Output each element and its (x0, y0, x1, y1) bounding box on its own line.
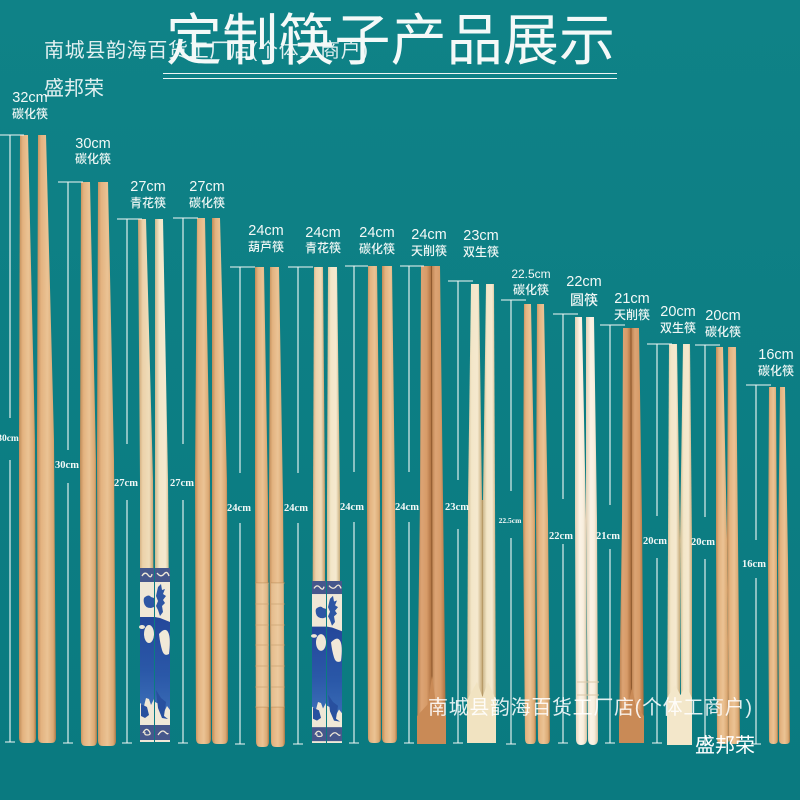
dimension line 27cm: 27cm (114, 478, 138, 489)
label: 22.5cm (511, 267, 551, 297)
dimension line 23cm: 23cm (445, 502, 469, 513)
dimension line 32cm side: 30cm (0, 135, 24, 742)
label: 21cm tensoge: 天削筷 (614, 307, 650, 322)
label: 20cm twin (660, 304, 696, 335)
label: 27cm carbonized (189, 179, 225, 210)
blue and white pattern (311, 581, 342, 743)
twin base (667, 685, 692, 745)
label: 24cm gourd (248, 223, 284, 254)
dimension line 27cm: 27cm (170, 478, 194, 489)
tensoge base (619, 688, 644, 743)
dimension line 22cm (549, 314, 578, 743)
label: 24cm tensoge (411, 227, 447, 258)
dimension line 30cm (55, 182, 83, 743)
chopstick pair: 20cm carbonized (716, 347, 740, 744)
label: 20cm carbonized: 碳化筷 (705, 324, 741, 339)
dimension line 16cm: 16cm (742, 559, 766, 570)
dimension line 20cm (643, 344, 672, 743)
tensoge base (417, 676, 446, 744)
twin split fill (482, 500, 483, 700)
dimension line 20cm: 20cm (643, 536, 667, 547)
dimension line 24cm (395, 266, 424, 743)
chopstick pair: 24cm gourd (255, 267, 285, 747)
label: 24cm tensoge: 24cm (411, 227, 447, 243)
dimension line 22.5cm: 22.5cm (499, 516, 522, 525)
dimension line 24cm (227, 267, 255, 744)
chopstick pair: 23cm twin (467, 284, 496, 743)
label: 24cm blue and white (305, 225, 341, 255)
dimension line 23cm (445, 281, 473, 743)
label: 16cm (758, 347, 794, 378)
label: 24cm carbonized (359, 225, 395, 256)
label: 27cm carbonized: 碳化筷 (189, 195, 225, 210)
chopstick pair: 21cm tensoge (619, 328, 644, 743)
dimension line 24cm (340, 266, 368, 743)
label: 24cm tensoge: 天削筷 (411, 243, 447, 258)
dimension line 22.5cm (499, 300, 526, 744)
label: 32cm: 碳化筷 (12, 106, 48, 121)
chopstick pair: 27cm carbonized (195, 218, 228, 744)
label: 20cm carbonized (705, 308, 741, 339)
chopstick pair: 32cm carbonized (19, 135, 56, 743)
label: 24cm blue and white: 青花筷 (305, 240, 341, 255)
dimension line 21cm (596, 325, 625, 743)
label: 23cm twin: 23cm (463, 228, 499, 244)
label: 22.5cm: 22.5cm (511, 267, 551, 281)
dimension line 21cm: 21cm (596, 531, 620, 542)
dimension line 24cm: 24cm (227, 503, 251, 514)
dimension line 30cm: 30cm (55, 460, 79, 471)
label: 20cm twin: 20cm (660, 304, 696, 320)
dimension line 22cm: 22cm (549, 531, 573, 542)
label: 30cm: 碳化筷 (75, 151, 111, 166)
label: 24cm gourd: 葫芦筷 (248, 239, 284, 254)
label: 24cm gourd: 24cm (248, 223, 284, 239)
label: 27cm blue and white: 青花筷 (130, 195, 166, 210)
label: 24cm carbonized: 24cm (359, 225, 395, 241)
dimension line 27cm (170, 218, 198, 743)
chopstick pair: 22cm round (575, 317, 599, 745)
chopstick pair: 24cm blue and white (311, 267, 342, 743)
dimension line 20cm: 20cm (691, 537, 715, 548)
label: 22cm round: 圆筷 (570, 292, 598, 308)
gourd carved segments (255, 583, 285, 707)
dimension line 24cm: 24cm (395, 502, 419, 513)
label: 21cm tensoge (614, 291, 650, 322)
tensoge split line (630, 328, 632, 690)
dimension line 20cm (691, 345, 720, 744)
tensoge split line (430, 266, 433, 680)
chopstick pair: 20cm twin (667, 344, 692, 745)
label: 20cm carbonized: 20cm (705, 308, 741, 324)
chopstick pair: 24cm tensoge (417, 266, 446, 744)
label: 22cm round: 22cm (566, 274, 602, 290)
label: 22.5cm: 碳化筷 (513, 282, 549, 297)
watermark bottom: shop name: 南城县韵海百货工厂店(个体工商户) (428, 696, 752, 719)
dimension line 24cm: 24cm (340, 502, 364, 513)
label: 30cm (75, 136, 111, 166)
chopstick pair: 30cm carbonized (80, 182, 116, 746)
label: 30cm: 30cm (75, 136, 111, 152)
twin base (467, 682, 496, 743)
label: 27cm blue and white (130, 179, 166, 210)
label: 22cm round (566, 274, 602, 308)
label: 27cm blue and white: 27cm (130, 179, 166, 195)
chopstick pair: 16cm carbonized (768, 387, 790, 744)
label: 24cm blue and white: 24cm (305, 225, 341, 241)
label: 27cm carbonized: 27cm (189, 179, 225, 195)
blue and white pattern (139, 568, 170, 742)
dimension line 24cm (284, 267, 313, 744)
round chopstick mark (577, 680, 599, 696)
label: 21cm tensoge: 21cm (614, 291, 650, 307)
label: 32cm: 32cm (12, 90, 48, 106)
dimension line 16cm (742, 385, 771, 744)
label: 24cm carbonized: 碳化筷 (359, 241, 395, 256)
watermark top: shop name: 南城县韵海百货工厂店(个体工商户) (44, 39, 368, 62)
chopstick pair: 22.5cm carbonized (523, 304, 550, 744)
dimension line 27cm (114, 219, 142, 743)
watermark top: seller name: 盛邦荣 (44, 77, 104, 100)
title: 定制筷子产品展示 (166, 9, 615, 72)
chopstick pair: 27cm blue and white (138, 219, 170, 742)
label: 32cm (12, 90, 48, 121)
label: 16cm: 16cm (758, 347, 794, 363)
dimension line 24cm: 24cm (284, 503, 308, 514)
watermark bottom: seller name: 盛邦荣 (695, 734, 755, 757)
chopstick pair: 24cm carbonized (367, 266, 397, 743)
label: 23cm twin (463, 228, 499, 259)
label: 23cm twin: 双生筷 (463, 244, 499, 259)
label: 16cm: 碳化筷 (758, 363, 794, 378)
title underline (163, 74, 617, 78)
label: 20cm twin: 双生筷 (660, 320, 696, 335)
